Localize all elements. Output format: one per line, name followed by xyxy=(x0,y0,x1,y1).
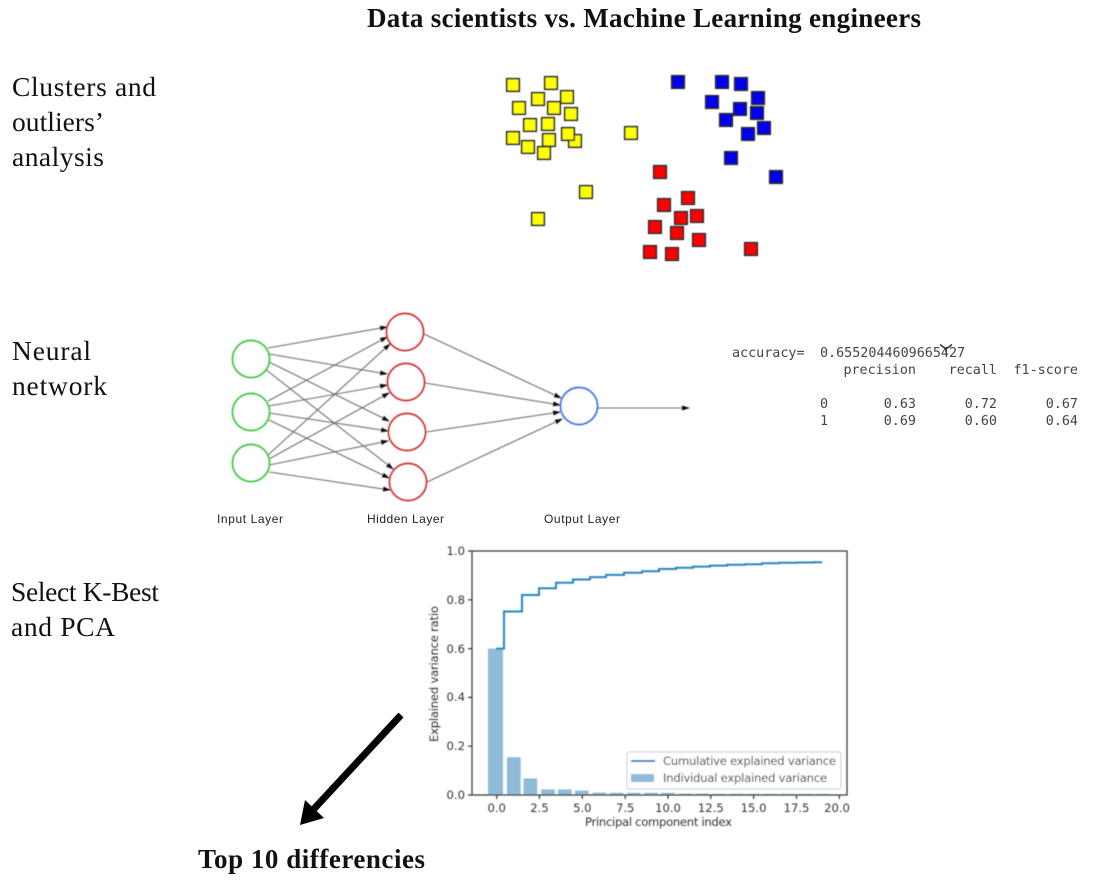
neural network layer labels: Input Layer xyxy=(217,512,283,526)
caption: top 10 differencies: Top 10 differencies xyxy=(198,844,425,874)
accuracy classification report: 0.69 xyxy=(884,414,916,429)
y axis tick labels: 0.0 xyxy=(447,788,465,802)
accuracy classification report xyxy=(732,344,1078,429)
heading: select k-best and pca: and PCA xyxy=(11,611,115,642)
connections xyxy=(265,327,689,490)
accuracy classification report: precision xyxy=(843,363,916,378)
y axis tick labels: 1.0 xyxy=(447,544,465,558)
accuracy classification report: 0.64 xyxy=(1046,414,1078,429)
y axis tick labels: 0.6 xyxy=(447,642,465,656)
pca explained variance chart xyxy=(427,544,850,829)
neural network diagram xyxy=(232,314,689,500)
x axis tick labels: 15.0 xyxy=(741,801,767,815)
heading: neural network: Neural xyxy=(12,335,91,366)
bars: individual explained variance xyxy=(488,649,829,795)
x axis tick labels: 2.5 xyxy=(530,801,549,815)
plot frame and ticks xyxy=(468,551,847,799)
red cluster xyxy=(644,166,757,260)
y axis tick labels: 0.8 xyxy=(447,593,465,607)
accuracy classification report: accuracy= xyxy=(732,346,805,361)
heading: select k-best and pca: Select K-Best xyxy=(11,576,159,607)
accuracy classification report: 0.67 xyxy=(1046,397,1078,412)
x axis tick labels: 10.0 xyxy=(655,801,681,815)
legend: Cumulative explained variance xyxy=(663,754,836,768)
y axis tick labels xyxy=(447,544,465,802)
heading: clusters and outliers analysis: analysis xyxy=(12,141,104,172)
heading: neural network xyxy=(12,335,107,401)
accuracy classification report: 1 xyxy=(820,414,828,429)
accuracy classification report: 0.72 xyxy=(965,397,997,412)
accuracy classification report: 0.63 xyxy=(884,397,916,412)
heading: clusters and outliers analysis: outliers’ xyxy=(12,106,104,137)
accuracy classification report: 0.60 xyxy=(965,414,997,429)
accuracy classification report: f1-score xyxy=(1014,363,1078,378)
neural network layer labels xyxy=(217,512,620,526)
x axis tick labels: 12.5 xyxy=(698,801,724,815)
scatter plot: clusters xyxy=(507,76,782,260)
title: Data scientists vs. Machine Learning engineers xyxy=(367,3,921,33)
x axis tick labels: 20.0 xyxy=(824,801,850,815)
output layer node xyxy=(560,388,598,424)
legend: Individual explained variance xyxy=(663,771,827,785)
cursor mark xyxy=(940,344,952,352)
legend xyxy=(627,752,841,789)
accuracy classification report: recall xyxy=(949,363,997,378)
accuracy classification report: 0 xyxy=(820,397,828,412)
arrow: pointing to top 10 differencies xyxy=(300,715,401,825)
x axis title: Principal component index xyxy=(585,815,732,829)
x axis tick labels: 17.5 xyxy=(784,801,809,815)
line: cumulative explained variance xyxy=(496,562,822,649)
x axis tick labels: 5.0 xyxy=(573,801,592,815)
x axis tick labels: 7.5 xyxy=(616,801,634,815)
heading: select k-best and pca xyxy=(11,576,159,642)
accuracy classification report: 0.6552044609665427 xyxy=(820,346,965,361)
neural network layer labels: Output Layer xyxy=(544,512,620,526)
heading: clusters and outliers analysis: Clusters and xyxy=(12,71,156,102)
y axis title: Explained variance ratio xyxy=(427,606,441,742)
x axis tick labels xyxy=(487,801,850,815)
heading: clusters and outliers analysis xyxy=(12,71,156,172)
y axis tick labels: 0.4 xyxy=(447,690,465,704)
blue cluster xyxy=(672,76,782,183)
heading: neural network: network xyxy=(12,370,107,401)
y axis tick labels: 0.2 xyxy=(447,739,465,753)
neural network layer labels: Hidden Layer xyxy=(367,512,444,526)
input layer nodes xyxy=(232,340,270,482)
x axis tick labels: 0.0 xyxy=(487,801,506,815)
yellow cluster xyxy=(507,77,637,225)
hidden layer nodes xyxy=(386,314,426,500)
